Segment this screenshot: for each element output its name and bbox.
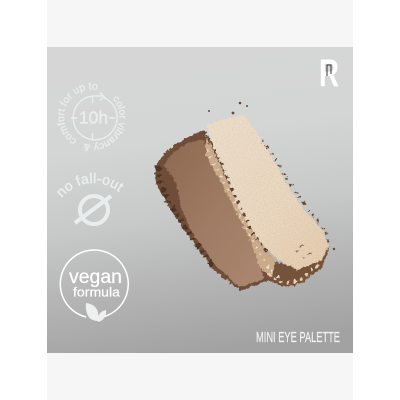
clock ticks [71,96,115,140]
crumbs: divider pale [207,150,280,278]
crumbs: loose [208,102,335,250]
light shade [207,115,328,270]
curved caption part one: comfort for up to [57,82,98,144]
badge: vegan formula [60,250,128,322]
clock ring [73,96,117,140]
product name: MINI EYE PALETTE [256,329,340,346]
logo [319,52,339,95]
clock arrow [92,92,104,100]
vegan word: vegan [69,267,122,288]
badge ring [60,250,128,317]
badge: no fall-out [57,172,124,226]
logo letter R: R [319,52,339,95]
dark shade [164,139,264,287]
crumbs: bottom edge [268,264,320,284]
logo inner mark [327,65,331,76]
top and bottom strip [47,0,353,400]
crumbs: right edge [262,140,330,246]
crumbs: lower right patch [296,240,316,258]
eyeshadow swatch [155,102,335,291]
crumbs: left edge [158,166,214,268]
crossed circle icon [75,196,111,224]
icon: leaves [86,303,106,322]
dark shade base crumble [155,130,268,291]
curved caption: no fall-out [57,172,124,198]
powder edge between shades [206,136,276,277]
badge: 10h wear [57,82,126,152]
panel: product background [47,47,353,353]
crumbs: divider dark [205,132,270,256]
curved caption part two: color vibrancy & [84,96,126,152]
10h label: 10h [79,108,108,128]
light shade lower crumble [258,246,330,287]
formula word: formula [73,284,121,300]
